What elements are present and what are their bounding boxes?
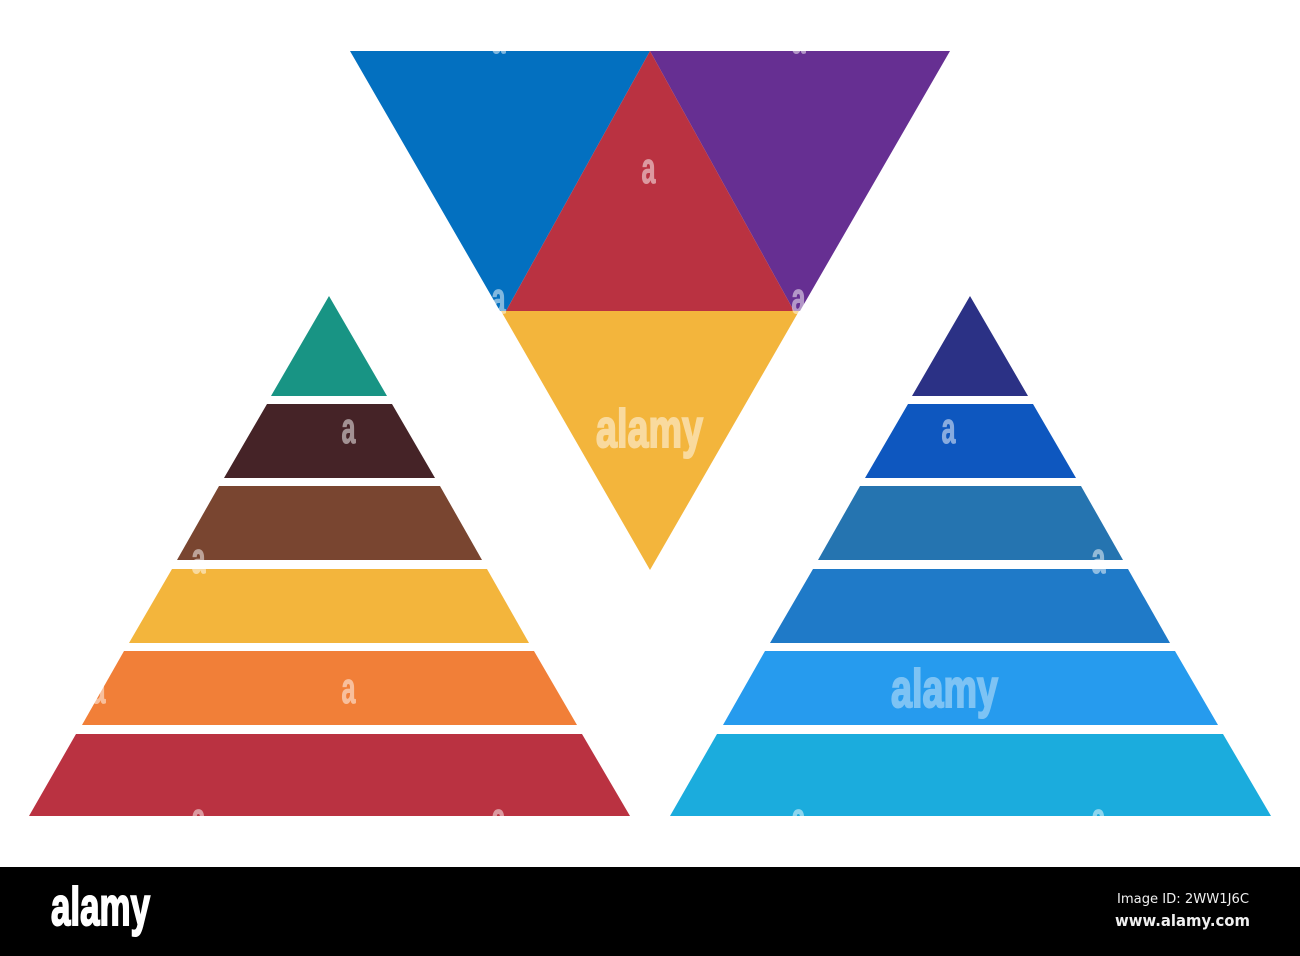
footer bar [0,867,1300,956]
left tier 6: red [29,734,630,816]
watermark letters grid: a [492,14,506,63]
right tier 3: steel blue [818,486,1123,560]
right tier 4: mid blue [770,569,1170,643]
watermark letters grid: a [92,664,106,713]
right tier 5: sky blue [723,651,1218,725]
right pyramid [670,296,1271,816]
right tier 1: navy [912,296,1028,396]
left tier 5: orange [82,651,577,725]
watermark letters grid: a [492,794,506,843]
centre segment: yellow [501,311,799,570]
watermark letters grid: a [792,14,806,63]
inverted centre triangle [350,51,950,570]
left tier 3: brown [177,486,482,560]
watermark letters grid: a [492,274,506,323]
watermark letters grid: a [1092,794,1106,843]
centre segment: purple [650,51,950,311]
watermark letters grid: a [1092,534,1106,583]
watermark letters grid: a [342,664,356,713]
image ID: Image ID: 2WW1J6C [1117,892,1249,907]
watermark letters grid: a [942,404,956,453]
footer URL: www.alamy.com [1115,911,1250,930]
left pyramid [29,296,630,816]
watermark letters grid [92,14,1106,843]
left tier 4: yellow [129,569,529,643]
watermark letters grid: a [342,404,356,453]
watermark letters grid: a [192,534,206,583]
watermark: centre: alamy [596,399,703,459]
right tier 2: royal blue [865,404,1076,478]
watermark letters grid: a [792,274,806,323]
centre segment: red [506,51,794,311]
right tier 6: cyan [670,734,1271,816]
watermark letters grid: a [792,794,806,843]
footer logo: alamy [51,877,150,937]
centre segment: blue [350,51,650,311]
watermark letters grid: a [192,794,206,843]
watermark letters grid: a [642,144,656,193]
watermark: right: alamy [891,659,998,719]
left tier 2: dark brown [224,404,435,478]
left tier 1: teal [271,296,387,396]
